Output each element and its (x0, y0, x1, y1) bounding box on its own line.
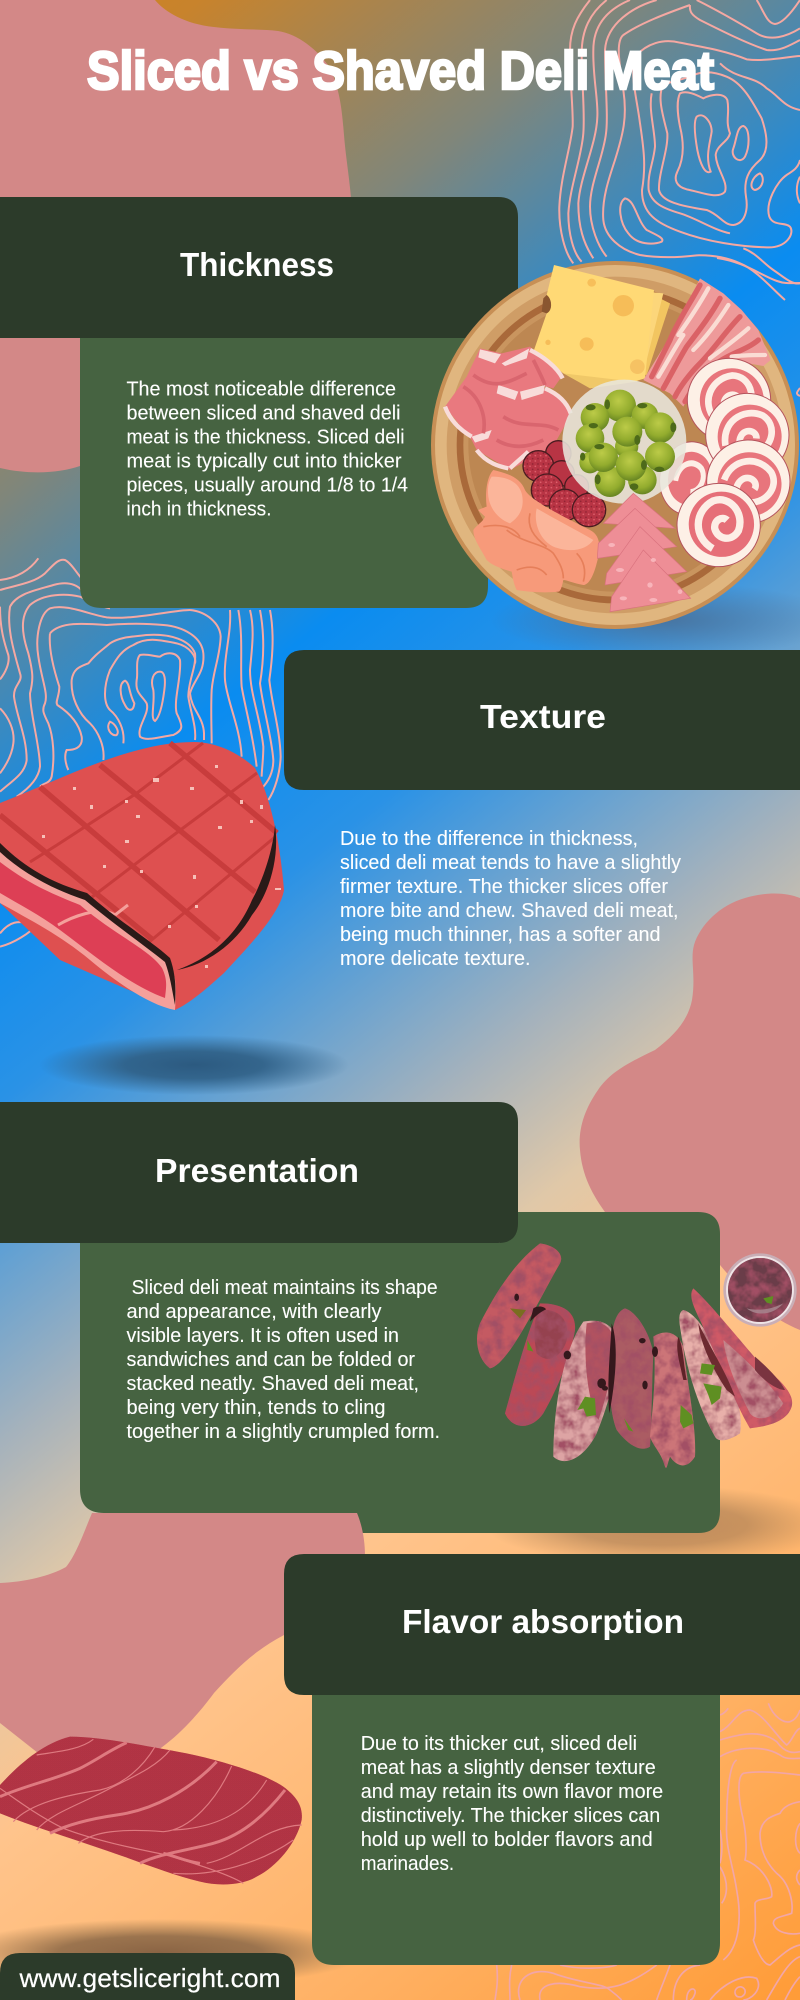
salami (523, 441, 606, 527)
text block: thickness: meat is typically cut into thicker (126, 450, 402, 472)
text block: texture: Due to the difference in thickness, (340, 828, 638, 850)
header panel: presentation (0, 1102, 518, 1243)
text block: flavor absorption: distinctively. The thicker slices can (361, 1805, 660, 1827)
illustration: tuna steak with pale veins (0, 1737, 302, 1884)
text block: texture: firmer texture. The thicker slices offer (340, 876, 668, 898)
contour lines: top right (559, 0, 800, 300)
text block: flavor absorption: Due to its thicker cut, sliced deli (361, 1733, 637, 1755)
heading: flavor absorption: Flavor absorption (402, 1603, 684, 1640)
fat edge and cut face (0, 847, 176, 1010)
contour lines: right edge near plate (717, 258, 800, 396)
contour lines: mid left (0, 558, 281, 947)
mortadella (597, 493, 691, 612)
heading: thickness: Thickness (180, 246, 334, 283)
illustration: charcuterie plate (431, 261, 800, 629)
blob: top-left pink (0, 0, 352, 472)
text block: texture (340, 828, 681, 970)
header panel: texture (284, 650, 800, 790)
blob: lower pink (0, 1513, 365, 1753)
illustration: watercolor meat slices (477, 1243, 797, 1468)
panel: presentation body (80, 1212, 720, 1533)
olive bowl (562, 380, 686, 504)
text block: flavor absorption: and may retain its own flavor more (361, 1781, 663, 1803)
text block: flavor absorption (361, 1733, 663, 1875)
text block: texture: more delicate texture. (340, 948, 530, 970)
bacon (643, 278, 771, 407)
text block: presentation: Sliced deli meat maintains its shape (132, 1277, 438, 1299)
text block: texture: being much thinner, has a softer and (340, 924, 660, 946)
text block: thickness: meat is the thickness. Sliced deli (126, 426, 404, 448)
panel: thickness body (80, 338, 488, 608)
header panel: thickness (0, 197, 518, 338)
ham slices (445, 347, 571, 470)
heading: texture: Texture (480, 698, 606, 735)
salmon (473, 470, 599, 592)
text block: thickness: inch in thickness. (126, 498, 272, 520)
header panel: flavor absorption (284, 1554, 800, 1695)
shadow: watercolor meat (485, 1485, 800, 1565)
text block: texture: sliced deli meat tends to have a slightly (340, 852, 681, 874)
text block: thickness: pieces, usually around 1/8 to 1/4 (126, 474, 408, 496)
text block: presentation: together in a slightly crumpled form. (126, 1421, 440, 1443)
shadow: steak (39, 1035, 349, 1095)
heading: presentation: Presentation (155, 1152, 359, 1189)
text block: presentation: and appearance, with clearly (126, 1301, 382, 1323)
shadow: tuna steak (0, 1919, 365, 1987)
shadow: plate (490, 582, 800, 658)
text block: flavor absorption: hold up well to bolder flavors and (361, 1829, 653, 1851)
panel: flavor body (312, 1695, 720, 1965)
text block: thickness (126, 378, 408, 520)
text block: presentation: being very thin, tends to cling (126, 1397, 386, 1419)
cheese (534, 265, 670, 388)
illustration: steak with grill marks (0, 742, 284, 1010)
text block: presentation: visible layers. It is often used in (126, 1325, 399, 1347)
blob: right pink (580, 894, 800, 1330)
text block: thickness: The most noticeable difference (126, 378, 396, 400)
text block: thickness: between sliced and shaved deli (126, 402, 400, 424)
text block: presentation: sandwiches and can be folded or (126, 1349, 415, 1371)
text block: flavor absorption: meat has a slightly denser texture (361, 1757, 656, 1779)
footer pill (0, 1953, 295, 2000)
text block: texture: more bite and chew. Shaved deli meat, (340, 900, 678, 922)
text block: flavor absorption: marinades. (361, 1853, 454, 1875)
contour lines: bottom right (495, 1703, 800, 2000)
text block: presentation: stacked neatly. Shaved deli meat, (126, 1373, 419, 1395)
rolled pancetta slices (654, 341, 800, 582)
footer url: www.getsliceright.com (18, 1963, 281, 1993)
title: Sliced vs Shaved Deli Meat (87, 41, 714, 101)
text block: presentation (126, 1277, 440, 1443)
